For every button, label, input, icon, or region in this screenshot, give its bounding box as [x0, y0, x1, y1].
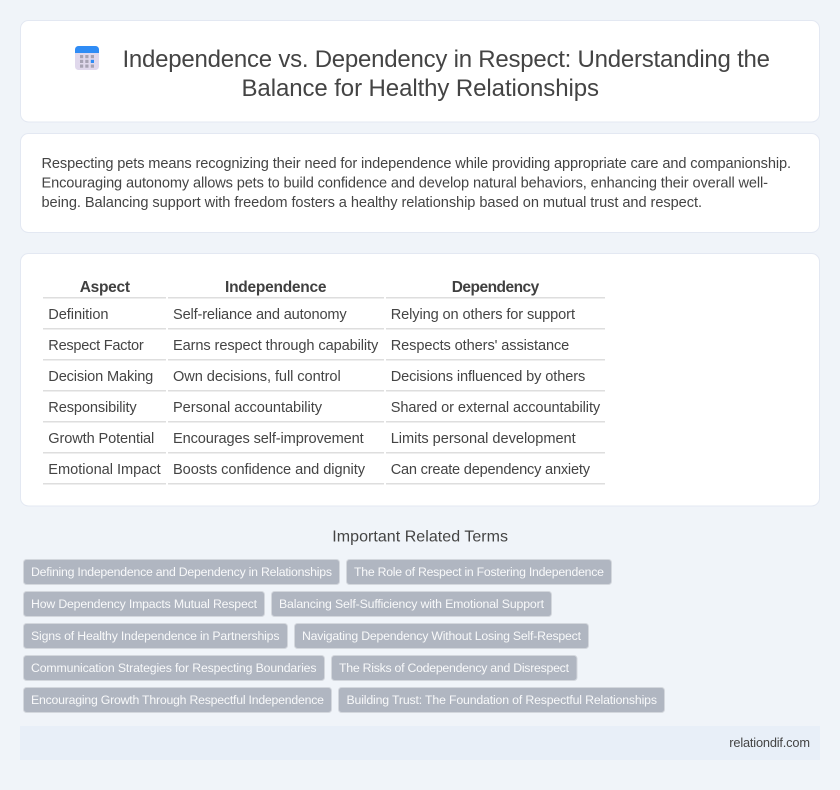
row: growth potential: Limits personal development	[391, 431, 576, 447]
row: emotional impact	[48, 462, 591, 478]
tag: defining independence: Defining Independence and Dependency in Relationships	[31, 565, 332, 579]
related terms heading: Important Related Terms	[332, 528, 508, 546]
tag: navigating dependency	[294, 624, 588, 648]
row: responsibility	[48, 400, 601, 416]
tag: role of respect: The Role of Respect in Fostering Independence	[354, 565, 604, 579]
tag: risks of codependency	[332, 656, 577, 680]
tag: signs of independence: Signs of Healthy Independence in Partnerships	[31, 629, 280, 643]
tag: balancing self-sufficiency	[272, 592, 552, 616]
row: respect factor: Respects others' assistance	[391, 338, 569, 354]
row: emotional impact: Boosts confidence and dignity	[173, 462, 366, 478]
tag: signs of independence	[24, 624, 288, 648]
tag: communication strategies: Communication Strategies for Respecting Boundaries	[31, 661, 316, 675]
row: growth potential	[48, 431, 576, 447]
row: respect factor: Respect Factor	[48, 338, 144, 354]
tag: mutual respect: How Dependency Impacts Mutual Respect	[31, 597, 258, 611]
row: definition: Definition	[48, 307, 108, 323]
panel: introduction	[20, 134, 820, 232]
row: decision making: Decision Making	[48, 369, 153, 385]
row: emotional impact: Emotional Impact	[48, 462, 161, 478]
tag: defining independence	[24, 560, 340, 584]
tag: role of respect	[346, 560, 612, 584]
row: emotional impact: Can create dependency anxiety	[391, 462, 591, 478]
intro paragraph: Encouraging autonomy allows pets to build confidence and develop natural behaviors, enhancing their overall well-	[42, 176, 768, 192]
table header: Aspect	[80, 279, 130, 296]
tag: balancing self-sufficiency: Balancing Self-Sufficiency with Emotional Support	[279, 597, 545, 611]
footer	[20, 726, 820, 760]
title	[122, 46, 770, 102]
row: decision making: Own decisions, full control	[173, 369, 341, 385]
row: respect factor: Earns respect through capability	[173, 338, 379, 354]
intro paragraph: Respecting pets means recognizing their need for independence while providing appropriate care and companionship.	[42, 156, 791, 172]
row: responsibility: Personal accountability	[173, 400, 323, 416]
row: definition: Self-reliance and autonomy	[173, 307, 347, 323]
tag: encouraging growth	[24, 688, 332, 712]
title: Balance for Healthy Relationships	[242, 75, 599, 102]
header panel	[20, 20, 820, 122]
tag: communication strategies	[24, 656, 324, 680]
row: decision making: Decisions influenced by others	[391, 369, 585, 385]
table header	[80, 279, 540, 296]
tag: building trust: Building Trust: The Foundation of Respectful Relationships	[346, 693, 657, 707]
tag: building trust	[338, 688, 664, 712]
tag: risks of codependency: The Risks of Codependency and Disrespect	[339, 661, 570, 675]
row: growth potential: Growth Potential	[48, 431, 154, 447]
icon: calendar	[75, 46, 99, 70]
row: definition: Relying on others for support	[391, 307, 575, 323]
table header: Dependency	[452, 279, 540, 296]
row: definition	[48, 307, 575, 323]
intro paragraph: being. Balancing support with freedom fosters a healthy relationship based on mutual trust and respect.	[42, 195, 702, 211]
related terms tags	[24, 560, 664, 712]
row: responsibility: Responsibility	[48, 400, 137, 416]
footer: relationdif.com	[729, 735, 810, 750]
table header: Independence	[225, 279, 327, 296]
row: growth potential: Encourages self-improvement	[173, 431, 364, 447]
title: Independence vs. Dependency in Respect: Understanding the	[122, 46, 770, 73]
panel: comparison table	[20, 254, 820, 506]
row: respect factor	[48, 338, 569, 354]
tag: navigating dependency: Navigating Dependency Without Losing Self-Respect	[302, 629, 582, 643]
row: responsibility: Shared or external accountability	[391, 400, 601, 416]
tag: mutual respect	[24, 592, 264, 616]
row: decision making	[48, 369, 585, 385]
tag: encouraging growth: Encouraging Growth Through Respectful Independence	[31, 693, 324, 707]
intro paragraph	[42, 156, 791, 211]
